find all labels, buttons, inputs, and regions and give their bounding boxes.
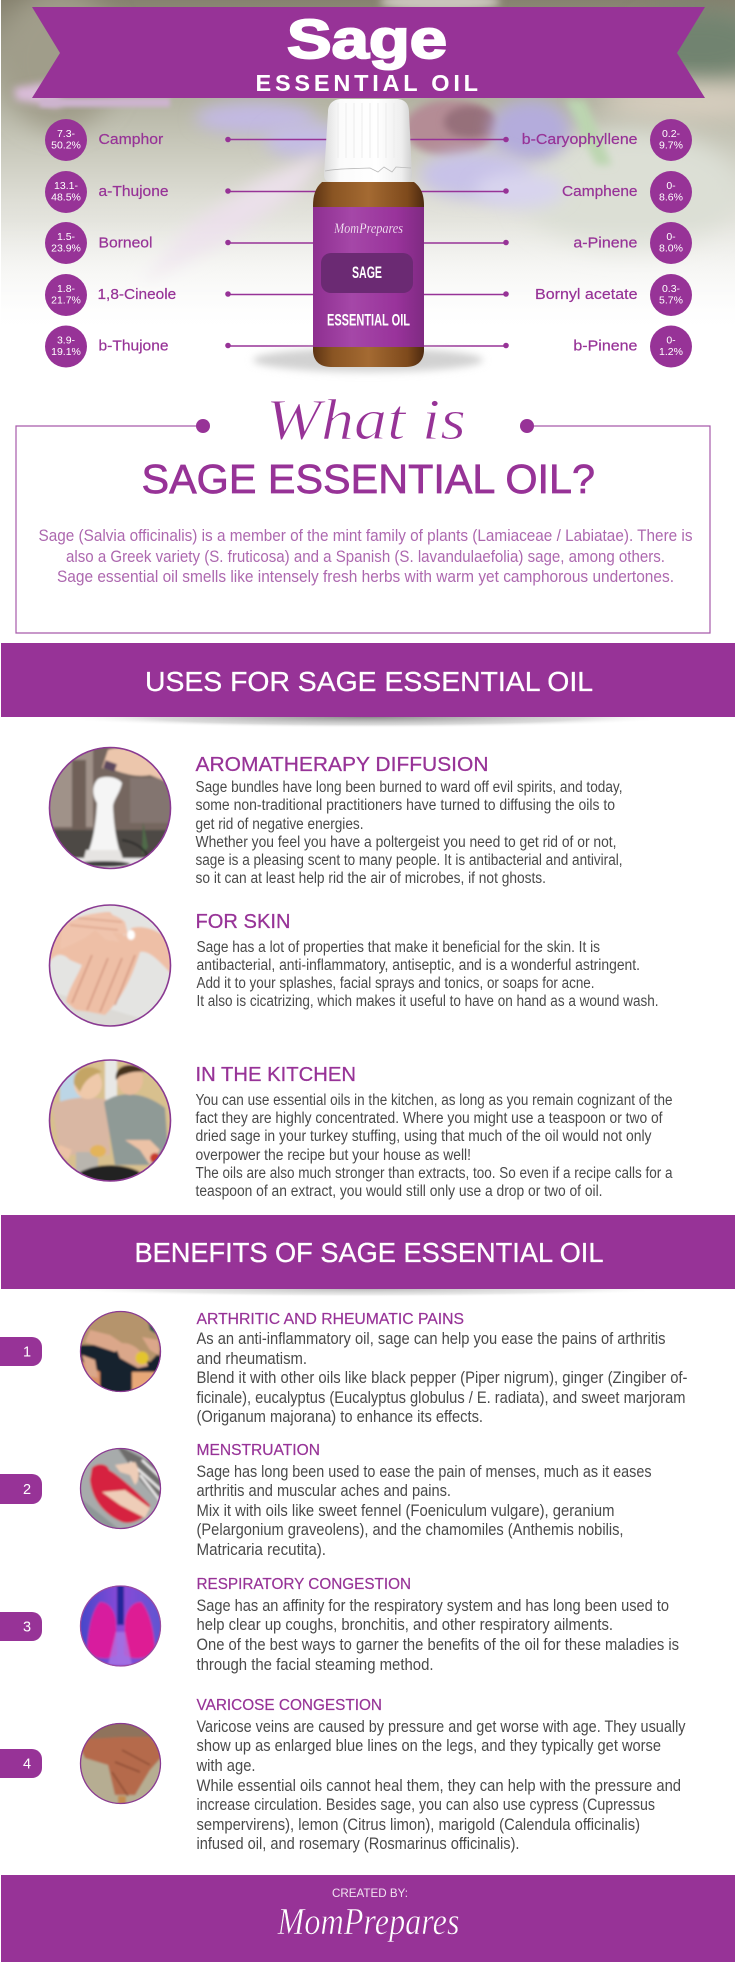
paragraph bbox=[196, 1597, 679, 1674]
paragraph bbox=[196, 1463, 652, 1559]
number tab 2 bbox=[0, 1474, 42, 1504]
compound: a-Thujone bbox=[45, 171, 168, 213]
compound: b-Caryophyllene bbox=[522, 119, 692, 161]
compound: b-Caryophyllene: b-Caryophyllene bbox=[522, 132, 638, 148]
photo: couple cooking bbox=[48, 1059, 172, 1182]
compound: a-Pinene: a-Pinene bbox=[573, 236, 637, 252]
section band: benefits: BENEFITS OF SAGE ESSENTIAL OIL bbox=[134, 1237, 604, 1268]
intro paragraph: Sage essential oil smells like intensely fresh herbs with warm yet camphorous undertones. bbox=[57, 568, 674, 586]
compound: 1,8-Cineole bbox=[45, 274, 176, 316]
section band: uses: USES FOR SAGE ESSENTIAL OIL bbox=[145, 666, 593, 697]
paragraph: The oils are also much stronger than extracts, too. So even if a recipe calls for a bbox=[196, 1165, 673, 1182]
paragraph: As an anti-inflammatory oil, sage can help you ease the pains of arthritis bbox=[196, 1330, 666, 1348]
paragraph: (Pelargonium graveolens), and the chamomiles (Anthemis nobilis, bbox=[196, 1521, 624, 1539]
essential oil bottle bbox=[253, 99, 483, 372]
paragraph: increase circulation. Besides sage, you can also use cypress (Cupressus bbox=[196, 1796, 655, 1814]
section band: benefits bbox=[1, 1215, 735, 1289]
compound: Camphene: 0- bbox=[666, 180, 676, 192]
paragraph: antibacterial, anti-inflammatory, antiseptic, and is a wonderful astringent. bbox=[196, 957, 640, 974]
paragraph: dried sage in your turkey stuffing, using that much of the oil would not only bbox=[196, 1128, 652, 1145]
compound: Camphor bbox=[45, 119, 163, 161]
created by label: CREATED BY: bbox=[332, 1888, 408, 1900]
bottle label subtitle: ESSENTIAL OIL bbox=[327, 310, 410, 330]
script heading: What is: What is bbox=[266, 387, 466, 452]
paragraph: Sage has an affinity for the respiratory system and has long been used to bbox=[196, 1597, 669, 1615]
benefit 3: respiratory congestion bbox=[0, 1576, 679, 1674]
compound: 1,8-Cineole: 1,8-Cineole bbox=[98, 287, 176, 303]
compound: a-Thujone: a-Thujone bbox=[98, 184, 168, 200]
paragraph: Sage has long been used to ease the pain of menses, much as it eases bbox=[196, 1463, 652, 1481]
heading: Sage Essential Oil?: SAGE ESSENTIAL OIL? bbox=[142, 456, 595, 502]
paragraph: show up as enlarged blue lines on the legs, and they typically get worse bbox=[196, 1737, 661, 1755]
compound: a-Thujone: 13.1- bbox=[54, 180, 78, 192]
photo: diffuser bbox=[48, 746, 172, 870]
left compounds list bbox=[45, 119, 176, 368]
benefit 1: arthritic and rheumatic pains bbox=[0, 1307, 688, 1426]
number tab 1 bbox=[0, 1337, 42, 1366]
paragraph: Sage has a lot of properties that make it beneficial for the skin. It is bbox=[196, 939, 600, 956]
compound: b-Caryophyllene: 9.7% bbox=[659, 140, 683, 152]
compound: Camphor: 7.3- bbox=[57, 128, 76, 140]
heading: RESPIRATORY CONGESTION bbox=[196, 1576, 411, 1593]
paragraph bbox=[196, 1330, 688, 1426]
paragraph: Blend it with other oils like black pepper (Piper nigrum), ginger (Zingiber of- bbox=[196, 1369, 688, 1387]
compound: Camphor: Camphor bbox=[98, 132, 163, 148]
subtitle: Essential Oil: ESSENTIAL OIL bbox=[256, 70, 478, 96]
compound: 1,8-Cineole: 1.8- bbox=[57, 283, 76, 295]
logo: MomPrepares: MomPrepares bbox=[277, 1901, 460, 1943]
photo: lungs bbox=[80, 1585, 162, 1667]
compound: Bornyl acetate bbox=[535, 274, 692, 316]
title ribbon bbox=[32, 7, 705, 98]
intro paragraph: also a Greek variety (S. fruticosa) and a Spanish (S. lavandulaefolia) sage, among others. bbox=[66, 548, 665, 566]
paragraph: overpower the recipe but your house as well! bbox=[196, 1147, 471, 1164]
paragraph: get rid of negative energies. bbox=[196, 816, 364, 833]
compound: Camphor: 50.2% bbox=[51, 140, 81, 152]
heading: VARICOSE CONGESTION bbox=[196, 1697, 382, 1714]
paragraph: It also is cicatrizing, which makes it useful to have on hand as a wound wash. bbox=[196, 993, 658, 1010]
compound: a-Thujone: 48.5% bbox=[51, 192, 81, 204]
compound: Bornyl acetate: 5.7% bbox=[659, 295, 683, 307]
compound: Camphene bbox=[562, 171, 692, 213]
paragraph: Whether you feel you have a poltergeist you need to get rid of or not, bbox=[196, 834, 616, 851]
compound: a-Pinene: 0- bbox=[666, 231, 676, 243]
compound: Bornyl acetate: Bornyl acetate bbox=[535, 287, 638, 303]
panel: what is sage essential oil bbox=[16, 387, 710, 633]
paragraph: You can use essential oils in the kitchen, as long as you remain cognizant of the bbox=[196, 1092, 672, 1109]
paragraph: Add it to your splashes, facial sprays and tonics, or soaps for acne. bbox=[196, 975, 594, 992]
heading: AROMATHERAPY DIFFUSION bbox=[196, 753, 488, 776]
photo: hands with ball bbox=[80, 1310, 162, 1392]
compound: b-Thujone: b-Thujone bbox=[98, 338, 168, 354]
compound: Camphene: 8.6% bbox=[659, 192, 683, 204]
paragraph: ficinale), eucalyptus (Eucalyptus globulus / E. radiata), and sweet marjoram bbox=[196, 1389, 686, 1407]
bottle label logo: MomPrepares bbox=[333, 221, 403, 237]
compound: b-Thujone: 3.9- bbox=[57, 334, 76, 346]
paragraph bbox=[196, 779, 622, 887]
section band: uses bbox=[1, 643, 735, 717]
compound: b-Thujone bbox=[45, 326, 168, 368]
paragraph: through the facial steaming method. bbox=[196, 1656, 434, 1674]
compound: b-Pinene: 0- bbox=[666, 334, 676, 346]
right compounds list bbox=[522, 119, 692, 368]
paragraph: some non-traditional practitioners have turned to diffusing the oils to bbox=[196, 797, 615, 814]
number tab 2: 2 bbox=[23, 1482, 31, 1498]
paragraph: Sage bundles have long been burned to ward off evil spirits, and today, bbox=[196, 779, 622, 796]
benefit 2: menstruation bbox=[0, 1442, 652, 1559]
paragraph: sage is a pleasing scent to many people. It is antibacterial and antiviral, bbox=[196, 852, 622, 869]
paragraph: help clear up coughs, bronchitis, and other respiratory ailments. bbox=[196, 1616, 613, 1634]
paragraph: teaspoon of an extract, you would still only use a drop or two of oil. bbox=[196, 1183, 602, 1200]
compound: b-Thujone: 19.1% bbox=[51, 346, 81, 358]
paragraph: and rheumatism. bbox=[196, 1350, 307, 1368]
use: in the kitchen bbox=[45, 1055, 673, 1200]
photo: hot water bottle bbox=[80, 1448, 162, 1530]
compound: Borneol bbox=[45, 222, 152, 264]
paragraph: with age. bbox=[196, 1757, 256, 1775]
heading: IN THE KITCHEN bbox=[196, 1063, 356, 1086]
photo: hands with cream bbox=[48, 904, 172, 1027]
number tab 3: 3 bbox=[23, 1620, 31, 1636]
photo: old hands bbox=[80, 1722, 162, 1804]
paragraph: sempervirens), lemon (Citrus limon), marigold (Calendula officinalis) bbox=[196, 1816, 640, 1834]
compound: b-Caryophyllene: 0.2- bbox=[662, 128, 681, 140]
compound: b-Pinene: b-Pinene bbox=[573, 338, 637, 354]
bottle label name plate bbox=[321, 253, 413, 293]
paragraph: Mix it with oils like sweet fennel (Foeniculum vulgare), geranium bbox=[196, 1502, 614, 1520]
benefit 4: varicose congestion bbox=[0, 1697, 686, 1853]
compound: Bornyl acetate: 0.3- bbox=[662, 283, 681, 295]
heading: FOR SKIN bbox=[196, 910, 290, 933]
paragraph: arthritis and muscular aches and pains. bbox=[196, 1482, 451, 1500]
title: Sage: Sage bbox=[287, 8, 447, 70]
connector lines bbox=[225, 137, 509, 348]
paragraph bbox=[196, 1718, 686, 1853]
bottle label name plate: SAGE bbox=[352, 263, 382, 282]
paragraph: fact they are highly concentrated. Where you might use a teaspoon or two of bbox=[196, 1110, 663, 1127]
compound: 1,8-Cineole: 21.7% bbox=[51, 295, 81, 307]
number tab 3 bbox=[0, 1612, 42, 1641]
number tab 1: 1 bbox=[23, 1344, 31, 1360]
paragraph: infused oil, and rosemary (Rosmarinus officinalis). bbox=[196, 1835, 520, 1853]
number tab 4: 4 bbox=[23, 1756, 31, 1772]
paragraph: One of the best ways to garner the benefits of the oil for these maladies is bbox=[196, 1636, 679, 1654]
compound: a-Pinene bbox=[573, 222, 692, 264]
paragraph: Matricaria recutita). bbox=[196, 1541, 326, 1559]
compound: Camphene: Camphene bbox=[562, 184, 638, 200]
paragraph: While essential oils cannot heal them, they can help with the pressure and bbox=[196, 1777, 681, 1795]
compound: b-Pinene: 1.2% bbox=[659, 346, 683, 358]
compound: a-Pinene: 8.0% bbox=[659, 243, 683, 255]
number tab 4 bbox=[0, 1749, 42, 1778]
intro paragraph bbox=[38, 527, 692, 586]
compound: Borneol: 1.5- bbox=[57, 231, 76, 243]
heading: MENSTRUATION bbox=[196, 1442, 320, 1459]
compound: Borneol: Borneol bbox=[98, 236, 152, 252]
intro paragraph: Sage (Salvia officinalis) is a member of the mint family of plants (Lamiaceae / Labiatae). There is bbox=[38, 527, 692, 545]
paragraph: (Origanum majorana) to enhance its effects. bbox=[196, 1408, 483, 1426]
footer band bbox=[1, 1875, 735, 1962]
paragraph bbox=[196, 1092, 673, 1200]
paragraph: so it can at least help rid the air of microbes, if not ghosts. bbox=[196, 870, 546, 887]
paragraph bbox=[196, 939, 658, 1010]
heading: ARTHRITIC AND RHEUMATIC PAINS bbox=[196, 1311, 464, 1328]
compound: b-Pinene bbox=[573, 326, 692, 368]
compound: Borneol: 23.9% bbox=[51, 243, 81, 255]
use: for skin bbox=[48, 904, 658, 1027]
hero background: blurred sage flower photo bbox=[1, 0, 735, 284]
use: aromatherapy diffusion bbox=[45, 743, 622, 887]
